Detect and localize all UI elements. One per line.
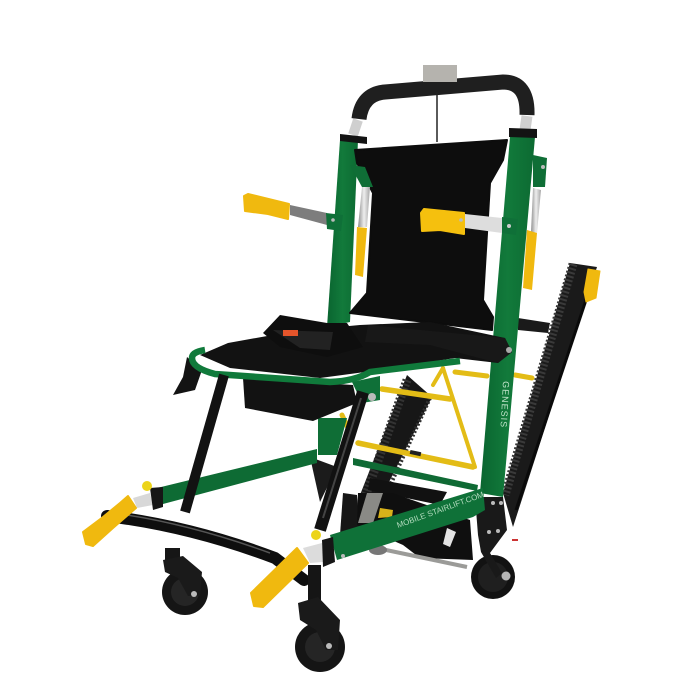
- right front caster: [295, 565, 345, 672]
- hanging seat strap: [173, 357, 202, 395]
- right foot peg: [251, 530, 335, 607]
- track yellow lever: [584, 269, 600, 302]
- left back bracket and slider: [350, 165, 373, 277]
- right front leg: [320, 392, 363, 530]
- seat cushion and pan: [200, 322, 512, 378]
- near drive track: [503, 263, 597, 527]
- motor and drive mechanism: [310, 457, 473, 567]
- yellow rear frame rods: [342, 368, 532, 467]
- green rear lower crossbar: [353, 458, 478, 491]
- left foot peg: [83, 481, 163, 546]
- left upright: [327, 140, 358, 327]
- wheel bracket plate: [475, 497, 518, 578]
- green seat frame tube: [192, 350, 460, 382]
- left front leg: [185, 375, 224, 512]
- right arm handle: [421, 209, 518, 235]
- left front caster: [162, 548, 208, 615]
- left arm handle: [244, 194, 343, 231]
- rear crossbar: [518, 318, 550, 333]
- green left base rail: [157, 449, 317, 504]
- green right base rail: MOBILE STAIRLIFT.COM: [396, 490, 485, 530]
- front foot bar: [107, 514, 304, 580]
- rear wheel: [471, 555, 515, 599]
- far drive track: [357, 375, 432, 518]
- green centre post: [318, 418, 347, 455]
- right upright: GENESIS: [499, 381, 511, 428]
- green right base rail: [330, 488, 485, 560]
- seat belt buckle: [263, 315, 363, 357]
- battery box: [243, 378, 357, 421]
- top handlebar: [340, 65, 537, 144]
- right upright: [480, 137, 535, 497]
- seat pivot bracket: [352, 376, 380, 403]
- right back bracket and slider: [523, 155, 547, 290]
- seat back cushion: [350, 140, 507, 330]
